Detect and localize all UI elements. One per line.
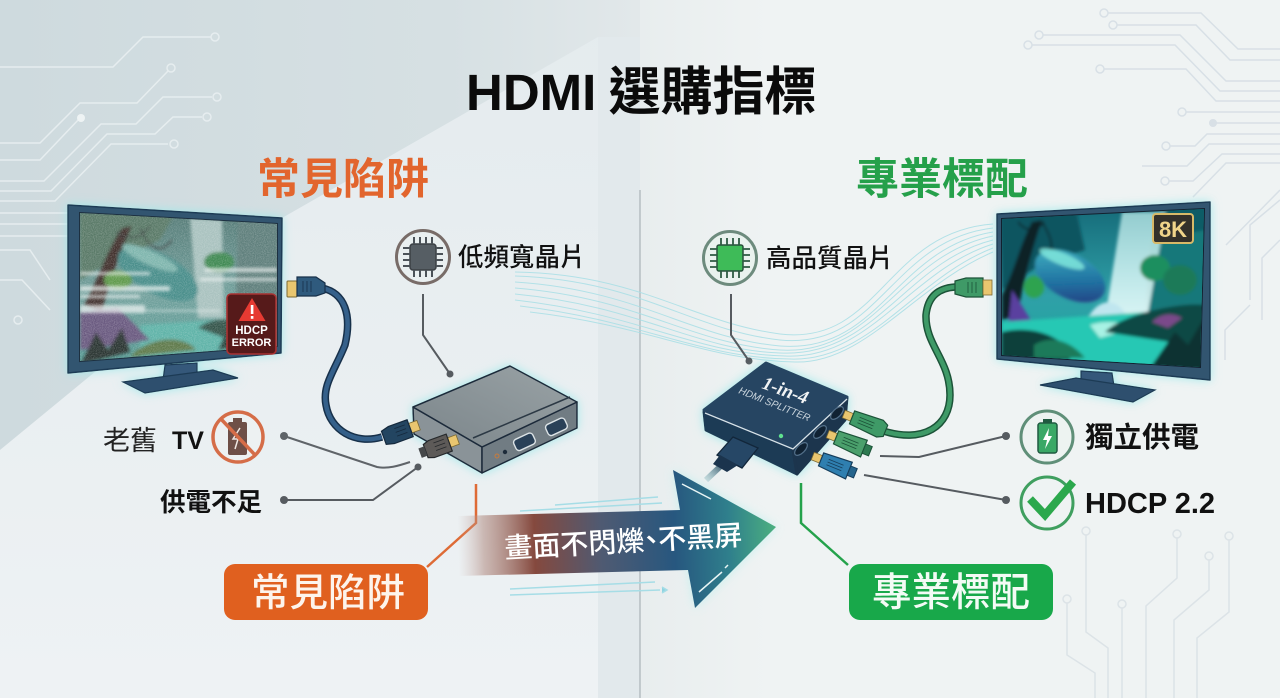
leader: old TV bbox=[280, 432, 410, 468]
leader: chip to low-end splitter bbox=[423, 294, 454, 378]
monitor: 8K TV bbox=[997, 202, 1210, 402]
arrow: no flicker, no black screen: 畫面不閃爍、不黑屏 bbox=[503, 514, 743, 567]
8K badge bbox=[1153, 214, 1193, 243]
label: old TV without power: TV bbox=[172, 427, 204, 455]
plug: green output two bbox=[824, 426, 874, 460]
label: quality chip bbox=[704, 232, 894, 284]
label: quality chip: 高品質晶片 bbox=[766, 238, 894, 275]
label: low-bandwidth chip: 低頻寬晶片 bbox=[458, 237, 586, 274]
plug: grey power bbox=[417, 431, 461, 462]
cable: blue HDMI bbox=[287, 277, 382, 439]
device: low-end splitter bbox=[413, 366, 577, 473]
heading: professional standard: 專業標配 bbox=[856, 145, 1028, 207]
leader: chip to pro splitter bbox=[731, 294, 752, 364]
plug: green output one bbox=[840, 406, 889, 439]
label: low-bandwidth chip bbox=[396, 230, 586, 284]
title: HDMI 選購指標 bbox=[466, 50, 816, 125]
label: insufficient power: 供電不足 bbox=[160, 482, 262, 519]
label: old TV without power bbox=[103, 412, 263, 462]
green connector line bbox=[801, 483, 848, 565]
arrow: no flicker, no black screen bbox=[458, 470, 776, 608]
monitor: old TV with HDCP error bbox=[68, 205, 282, 393]
device: 1-in-4 HDMI splitter: 1-in-4 bbox=[759, 373, 811, 409]
noisy screen scene bbox=[78, 210, 280, 365]
label: old TV without power: 老舊 bbox=[103, 419, 157, 458]
label: HDCP 2.2 bbox=[1021, 477, 1215, 529]
leader: HDCP bbox=[864, 475, 1010, 504]
leader: insufficient power bbox=[280, 464, 422, 504]
HDCP error badge: HDCP bbox=[235, 325, 268, 337]
leader: independent power bbox=[880, 432, 1010, 457]
device: 1-in-4 HDMI splitter bbox=[704, 363, 847, 474]
plug: black input bbox=[706, 437, 758, 480]
label: HDCP 2.2: HDCP 2.2 bbox=[1085, 488, 1215, 520]
signal wave strands bbox=[515, 224, 993, 362]
icon: crossed-out battery bbox=[213, 412, 263, 462]
HDCP error badge: ERROR bbox=[232, 337, 271, 349]
8K badge: 8K bbox=[1159, 217, 1187, 242]
plug: blue into splitter bbox=[381, 417, 422, 446]
label: independent power bbox=[1021, 411, 1199, 463]
vivid screen scene bbox=[1000, 205, 1206, 372]
heading: common pitfalls: 常見陷阱 bbox=[257, 145, 429, 207]
label: independent power: 獨立供電 bbox=[1085, 415, 1199, 456]
orange connector line bbox=[427, 484, 476, 567]
pill: common pitfalls: 常見陷阱 bbox=[251, 562, 405, 618]
plug: blue output three bbox=[809, 448, 859, 482]
device: 1-in-4 HDMI splitter: HDMI SPLITTER bbox=[737, 386, 812, 424]
HDMI ports bbox=[512, 417, 569, 452]
HDCP error badge bbox=[227, 294, 276, 354]
cable: green HDMI bbox=[880, 278, 992, 435]
pill: professional standard: 專業標配 bbox=[872, 561, 1030, 618]
